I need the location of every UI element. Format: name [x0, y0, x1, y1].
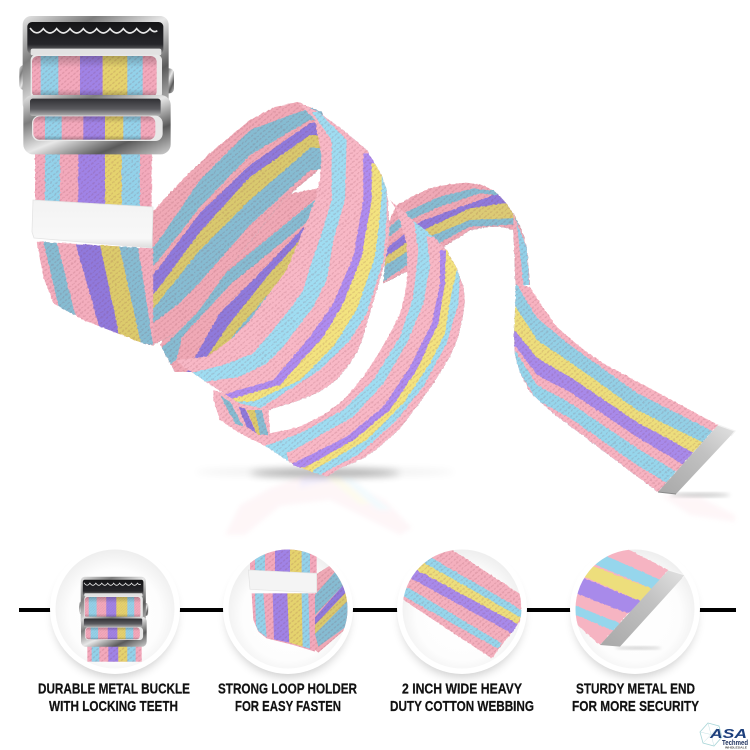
caption: wide heavy duty webbing: 2 INCH WIDE HEAVY — [402, 680, 522, 698]
connector lines — [19, 608, 736, 612]
circle: strong loop holder — [223, 537, 353, 677]
caption: sturdy metal end — [572, 680, 699, 715]
logo: ASA Techmed Wholesale — [700, 723, 748, 750]
belt: front upper loop — [177, 102, 390, 410]
metal tip — [658, 425, 735, 494]
belt: rear upper band — [148, 102, 323, 346]
belt: long tail running to the metal end — [514, 284, 718, 492]
metal buckle with locking teeth — [19, 16, 174, 154]
belt: front lower loop — [213, 200, 465, 476]
caption: sturdy metal end: FOR MORE SECURITY — [572, 698, 699, 715]
belt: rear lower band — [160, 188, 318, 372]
caption: wide heavy duty webbing — [390, 680, 534, 715]
circle: wide cotton webbing — [397, 544, 527, 677]
floor shadow and reflection — [195, 468, 735, 535]
caption: durable metal buckle: WITH LOCKING TEETH — [49, 698, 178, 715]
circle: durable metal buckle — [50, 544, 180, 677]
belt: rear strap section behind the loops — [383, 182, 530, 286]
caption: sturdy metal end: STURDY METAL END — [576, 680, 695, 698]
circle: sturdy metal end — [570, 544, 700, 677]
logo: ASA Techmed Wholesale: WHOLESALE — [725, 746, 747, 750]
white loop holder — [32, 200, 153, 248]
belt: strap section below the buckle — [35, 150, 152, 210]
caption: durable metal buckle: DURABLE METAL BUCKLE — [38, 680, 190, 698]
caption: strong loop holder — [218, 680, 357, 715]
logo: ASA Techmed Wholesale: ASA — [709, 726, 747, 741]
caption: strong loop holder: FOR EASY FASTEN — [235, 698, 341, 715]
caption: strong loop holder: STRONG LOOP HOLDER — [218, 680, 357, 698]
belt: strap section below the loop holder — [33, 240, 157, 347]
caption: wide heavy duty webbing: DUTY COTTON WEBBING — [390, 698, 534, 715]
caption: durable metal buckle — [38, 680, 190, 715]
